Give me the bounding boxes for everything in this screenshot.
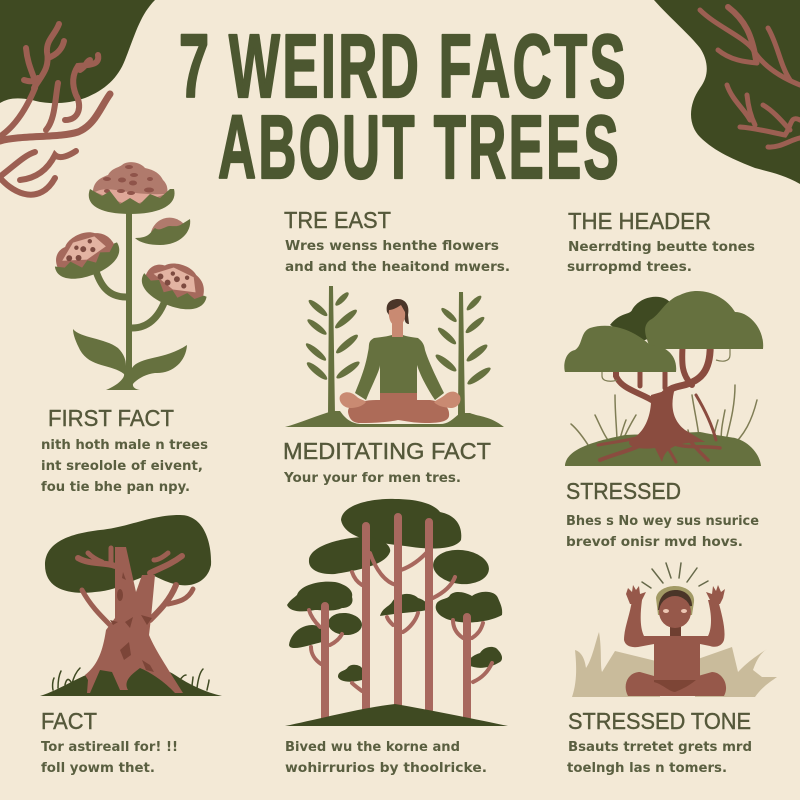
text: grove caption [285, 739, 487, 776]
icon: meditating person between plants [285, 286, 504, 427]
icon: person with raised hands [572, 563, 777, 697]
text: fact: Tor astireall for! !! [41, 739, 178, 755]
corner decoration: top-right blob with branches [654, 0, 800, 184]
text: first fact: fou tie bhe pan npy. [41, 479, 190, 495]
text: grove caption: wohirrurios by thoolricke. [285, 760, 487, 776]
corner decoration: top-left blob with branches [0, 0, 155, 195]
text: the header [567, 208, 755, 275]
title [179, 17, 628, 198]
text: tree east: and and the heaitond mwers. [285, 259, 510, 275]
text: stressed tone: Bsauts trretet grets mrd [568, 739, 752, 755]
text: fact: foll yowm thet. [41, 760, 155, 776]
text: stressed [566, 478, 759, 550]
text: grove caption: Bived wu the korne and [285, 739, 460, 755]
text: first fact: int sreolole of eivent, [41, 458, 203, 474]
text: stressed tone [567, 708, 752, 776]
text: meditating fact: Your your for men tres. [283, 470, 461, 486]
text: first fact: FIRST FACT [48, 405, 174, 431]
text: stressed tone: toelngh las n tomers. [567, 760, 727, 776]
text: tree east: Wres wenss henthe flowers [285, 238, 499, 254]
text: tree east: TRE EAST [284, 207, 391, 233]
text: stressed: STRESSED [566, 478, 681, 504]
text: meditating fact [283, 438, 491, 486]
icon: tree grove [285, 499, 508, 726]
text: stressed: Bhes s No wey sus nsurice [566, 513, 759, 529]
icon: large tree [40, 515, 222, 696]
text: stressed tone: STRESSED TONE [568, 708, 751, 734]
text: the header: Neerrdting beutte tones [568, 239, 755, 255]
text: first fact: nith hoth male n trees [41, 437, 208, 453]
text: stressed: brevof onisr mvd hovs. [566, 534, 743, 550]
text: fact: FACT [41, 708, 97, 734]
icon: banyan tree on hill [564, 291, 763, 466]
text: the header: THE HEADER [568, 208, 711, 234]
text: fact [41, 708, 178, 776]
icon: flowering plant [47, 162, 215, 390]
text: meditating fact: MEDITATING FACT [283, 438, 491, 464]
text: the header: surropmd trees. [567, 259, 692, 275]
text: tree east [284, 207, 510, 275]
text: first fact [41, 405, 208, 495]
